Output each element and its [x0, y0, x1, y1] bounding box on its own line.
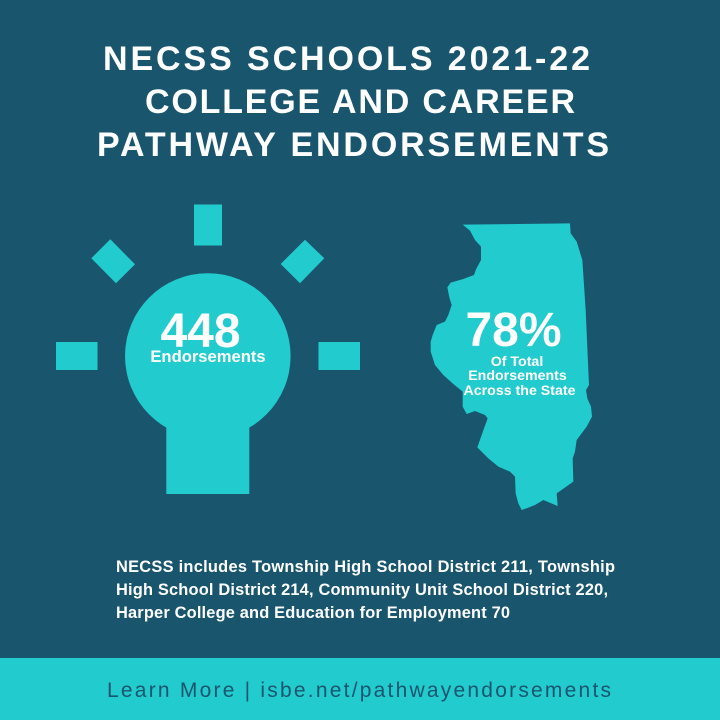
title: NECSS SCHOOLS 2021-22 — [103, 40, 590, 78]
text block: NECSS members: High School District 214, Community Unit School District 220, — [116, 581, 608, 599]
title: COLLEGE AND CAREER — [145, 83, 575, 121]
title — [97, 40, 609, 164]
footer band — [0, 658, 720, 720]
stat: 78% of total endorsements: 78% — [465, 304, 562, 357]
title: PATHWAY ENDORSEMENTS — [97, 126, 609, 164]
stat: 78% of total endorsements — [464, 304, 576, 399]
stat: 78% of total endorsements: Of Total — [491, 354, 543, 370]
icon: bulb rays — [56, 204, 360, 370]
stat: 448 endorsements — [150, 305, 266, 366]
icon: light bulb with 448 endorsements — [56, 204, 360, 494]
stat: 448 endorsements: Endorsements — [150, 347, 266, 366]
icon: Illinois state shape — [431, 223, 592, 510]
icon: bulb body — [125, 273, 291, 494]
map: Illinois with 78% statistic — [431, 223, 592, 510]
stat: 448 endorsements: 448 — [160, 305, 241, 358]
text block: NECSS members — [116, 558, 615, 622]
stat: 78% of total endorsements: Across the State — [464, 383, 576, 399]
text block: NECSS members: NECSS includes Township High School District 211, Township — [116, 558, 615, 576]
text block: NECSS members: Harper College and Education for Employment 70 — [116, 604, 510, 622]
footer link text: Learn More | isbe.net/pathwayendorsements — [107, 679, 611, 702]
stat: 78% of total endorsements: Endorsements — [468, 368, 567, 384]
